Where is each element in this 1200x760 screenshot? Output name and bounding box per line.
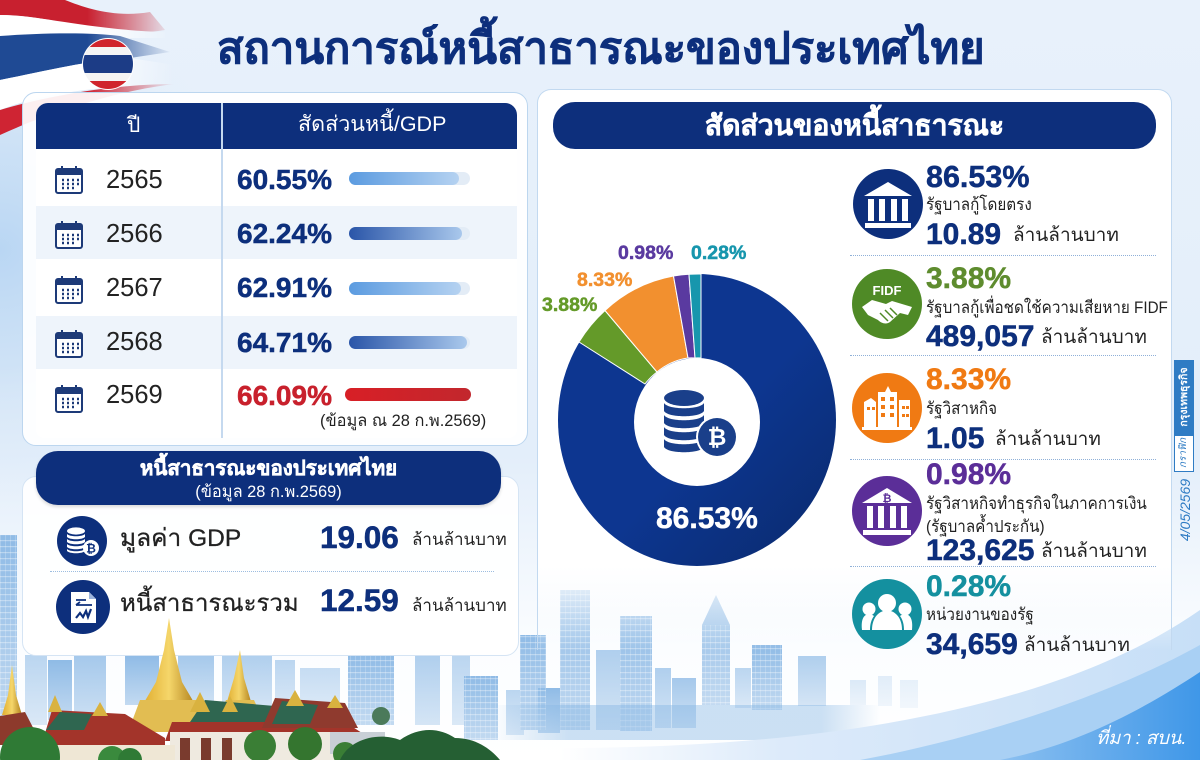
graphic label: กราฟิก (1178, 438, 1189, 468)
icon: bitcoin bank: ₿ (883, 493, 892, 505)
table header (36, 103, 517, 149)
amount: 489,057 (926, 320, 1034, 353)
divider (850, 255, 1156, 256)
row shading 2568 (36, 316, 517, 369)
panel: debt to GDP table (22, 92, 528, 446)
bar 2567 (349, 282, 470, 295)
icon: coin stack: ₿ (708, 424, 726, 450)
donut label 86.53%: 86.53% (656, 502, 758, 535)
amount: 123,625 (926, 534, 1034, 567)
panel: public debt of Thailand (22, 476, 519, 656)
year 2568: 2568 (106, 328, 163, 356)
icon: FIDF handshake: FIDF (873, 283, 901, 298)
percent: 3.88% (926, 262, 1011, 295)
icon: calendar 2569 (55, 385, 83, 413)
year 2565: 2565 (106, 166, 163, 194)
bar 2566 (349, 227, 470, 240)
table: debt to GDP by year (36, 103, 517, 438)
icon: bitcoin bank (852, 476, 922, 546)
divider (50, 571, 494, 572)
heading text: สัดส่วนของหนี้สาธารณะ (705, 109, 1004, 141)
label: GDP value: มูลค่า GDP (120, 525, 241, 552)
icon: calendar 2568 (55, 330, 83, 358)
item: FIDF (852, 262, 1168, 353)
icon: bank (853, 169, 923, 239)
amount: 1.05 (926, 422, 984, 455)
value 62.91%: 62.91% (237, 272, 332, 303)
bar 2568 (349, 336, 470, 349)
heading text: หนี้สาธารณะของประเทศไทย (140, 457, 397, 480)
heading pill: public debt (36, 451, 501, 505)
heading pill: debt composition (553, 102, 1156, 149)
column divider (221, 103, 222, 438)
value: debt: 12.59 (320, 582, 399, 618)
year 2569: 2569 (106, 381, 163, 409)
value 62.24%: 62.24% (237, 218, 332, 249)
label: รัฐวิสาหกิจ (926, 399, 997, 418)
credit strip (1174, 360, 1194, 541)
item: direct government borrowing (853, 160, 1119, 251)
icon: FIDF handshake (852, 269, 922, 339)
year 2567: 2567 (106, 274, 163, 302)
value 66.09%: 66.09% (237, 380, 332, 411)
label: รัฐบาลกู้โดยตรง (926, 195, 1032, 214)
bar 2565 (349, 172, 470, 185)
publisher name: กรุงเทพธุรกิจ (1178, 367, 1190, 427)
label: total public debt: หนี้สาธารณะรวม (120, 590, 299, 617)
donut label 8.33%: 8.33% (577, 269, 632, 291)
divider (850, 459, 1156, 460)
divider (850, 566, 1156, 567)
title: สถานการณ์หนี้สาธารณะของประเทศไทย (217, 25, 985, 73)
item: state agencies (852, 570, 1130, 661)
label: หน่วยงานของรัฐ (926, 605, 1034, 624)
source: ที่มา : สบน. (1096, 727, 1186, 748)
icon: flag badge (82, 38, 134, 90)
label: รัฐวิสาหกิจทำธุรกิจในภาคการเงิน (926, 494, 1147, 513)
item: financial state enterprises (852, 458, 1147, 567)
unit: ล้านล้านบาท (1024, 635, 1130, 656)
icon: calendar 2567 (55, 276, 83, 304)
row shading 2566 (36, 206, 517, 259)
amount: 34,659 (926, 628, 1018, 661)
publisher name (1174, 360, 1194, 435)
value: GDP: 19.06 (320, 519, 399, 555)
percent: 8.33% (926, 363, 1011, 396)
label note: (รัฐบาลค้ำประกัน) (926, 517, 1045, 536)
donut label 3.88%: 3.88% (542, 294, 597, 316)
date: 4/05/2569 (1177, 479, 1193, 541)
amount: 10.89 (926, 218, 1001, 251)
icon: calendar 2566 (55, 221, 83, 249)
unit: debt: ล้านล้านบาท (412, 596, 507, 615)
icon: GDP coins: ₿ (86, 542, 96, 556)
unit: ล้านล้านบาท (1041, 541, 1147, 562)
unit: ล้านล้านบาท (1041, 327, 1147, 348)
header: year: ปี (127, 114, 140, 137)
divider (850, 355, 1156, 356)
icon: debt document (56, 580, 110, 634)
unit: ล้านล้านบาท (1013, 225, 1119, 246)
icon: GDP coins (57, 516, 107, 566)
percent: 86.53% (926, 160, 1029, 194)
donut chart (558, 274, 836, 566)
icon: coin stack (664, 390, 738, 458)
icon: calendar 2565 (55, 166, 83, 194)
donut label 0.28%: 0.28% (691, 242, 746, 264)
graphic label (1174, 435, 1194, 472)
flag (0, 0, 175, 135)
item: state enterprises (852, 363, 1101, 455)
unit: GDP: ล้านล้านบาท (412, 530, 507, 549)
percent: 0.28% (926, 570, 1011, 603)
skyline (0, 535, 918, 740)
panel: debt composition (537, 89, 1172, 650)
heading note: (ข้อมูล 28 ก.พ.2569) (195, 483, 342, 501)
header: debt ratio: สัดส่วนหนี้/GDP (298, 112, 446, 136)
wave (560, 610, 1200, 760)
icon: people (852, 579, 922, 649)
note: data date: (ข้อมูล ณ 28 ก.พ.2569) (320, 412, 486, 430)
donut label 0.98%: 0.98% (618, 242, 673, 264)
value 64.71%: 64.71% (237, 327, 332, 358)
value 60.55%: 60.55% (237, 164, 332, 195)
bar 2569 (345, 388, 471, 401)
label: รัฐบาลกู้เพื่อชดใช้ความเสียหาย FIDF (926, 298, 1168, 317)
unit: ล้านล้านบาท (995, 429, 1101, 450)
year 2566: 2566 (106, 220, 163, 248)
palace and trees (0, 618, 500, 760)
percent: 0.98% (926, 458, 1011, 491)
icon: buildings (852, 373, 922, 443)
